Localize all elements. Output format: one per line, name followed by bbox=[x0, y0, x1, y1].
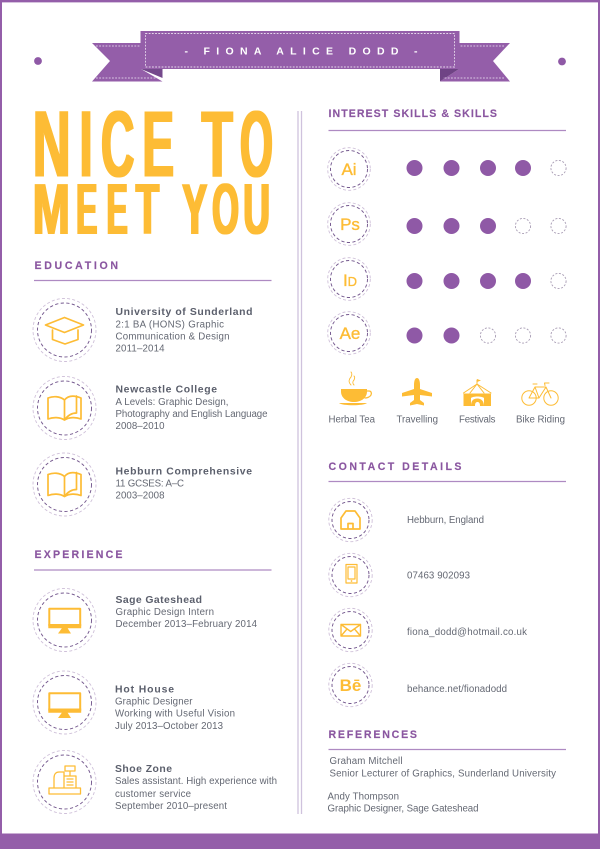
heading: contact details: CONTACT DETAILS bbox=[328, 461, 462, 473]
panel: education bbox=[33, 260, 272, 516]
title: nice to meet you: M bbox=[33, 168, 70, 250]
panel: interests bbox=[328, 372, 565, 426]
entry: hot house: July 2013–October 2013 bbox=[115, 721, 223, 732]
icon: plane bbox=[402, 378, 432, 406]
title: nice to meet you: E bbox=[142, 91, 174, 197]
entry: hebburn comprehensive bbox=[33, 453, 252, 516]
reference: andy thompson bbox=[328, 792, 478, 814]
name ribbon banner bbox=[92, 31, 510, 82]
entry: newcastle college: Newcastle College bbox=[116, 384, 217, 396]
title: nice to meet you: E bbox=[107, 168, 128, 250]
label: herbal tea: Herbal Tea bbox=[328, 414, 376, 426]
entry: shoe zone: September 2010–present bbox=[115, 801, 227, 812]
entry: university of sunderland: 2:1 BA (HONS) Graphic bbox=[116, 320, 224, 330]
entry: newcastle college bbox=[33, 376, 268, 440]
reference: graham mitchell: Graham Mitchell bbox=[330, 756, 402, 767]
panel: experience bbox=[33, 549, 277, 814]
contact: phone: 07463 902093 bbox=[407, 570, 470, 582]
title: nice to meet you: T bbox=[202, 92, 233, 198]
contact: behance bbox=[329, 663, 507, 707]
entry: hebburn comprehensive: 2003–2008 bbox=[116, 490, 164, 502]
title: nice to meet you: O bbox=[212, 170, 239, 251]
entry: university of sunderland: 2011–2014 bbox=[116, 344, 165, 354]
entry: shoe zone: Shoe Zone bbox=[115, 764, 172, 775]
name text: - FIONA ALICE DODD - bbox=[184, 46, 418, 58]
entry: newcastle college: 2008–2010 bbox=[116, 421, 165, 432]
entry: sage gateshead: Sage Gateshead bbox=[116, 595, 202, 606]
entry: university of sunderland: University of Sunderland bbox=[116, 307, 252, 318]
entry: sage gateshead bbox=[33, 588, 258, 652]
skill: illustrator: Ai bbox=[341, 160, 357, 179]
panel: references bbox=[328, 729, 566, 814]
panel: contact details bbox=[328, 461, 566, 707]
title: nice to meet you: I bbox=[80, 92, 92, 197]
reference: graham mitchell: Senior Lecturer of Graphics, Sunderland University bbox=[330, 768, 556, 780]
label: bike riding: Bike Riding bbox=[516, 414, 565, 426]
contact: email: fiona_dodd@hotmail.co.uk bbox=[407, 627, 527, 638]
icon: herbal tea bbox=[339, 372, 371, 405]
skill: photoshop bbox=[328, 203, 566, 245]
decorative dot right bbox=[558, 58, 566, 65]
contact: address bbox=[329, 498, 484, 542]
entry: shoe zone bbox=[33, 750, 277, 814]
panel: interest skills and skills bbox=[328, 108, 566, 354]
entry: newcastle college: A Levels: Graphic Design, bbox=[116, 397, 228, 408]
title: nice to meet you: O bbox=[240, 92, 273, 197]
entry: hot house: Working with Useful Vision bbox=[115, 708, 235, 720]
contact: behance: Bē bbox=[340, 676, 361, 695]
heading: references: REFERENCES bbox=[328, 729, 417, 741]
reference: graham mitchell bbox=[330, 756, 556, 780]
contact: phone bbox=[329, 553, 470, 597]
title: nice to meet you bbox=[33, 91, 273, 251]
label: travelling: Travelling bbox=[396, 414, 438, 426]
contact: address: Hebburn, England bbox=[407, 515, 484, 526]
skill: after effects: Ae bbox=[340, 324, 360, 343]
title: nice to meet you: Y bbox=[182, 170, 207, 250]
entry: hot house: Graphic Designer bbox=[115, 696, 193, 708]
contact: email bbox=[329, 608, 527, 652]
entry: hebburn comprehensive: Hebburn Comprehensive bbox=[116, 466, 252, 478]
entry: hebburn comprehensive: 11 GCSES: A–C bbox=[116, 478, 184, 490]
title: nice to meet you: T bbox=[136, 169, 159, 250]
skill: illustrator bbox=[328, 148, 566, 190]
title: nice to meet you: U bbox=[243, 170, 270, 250]
entry: sage gateshead: December 2013–February 2014 bbox=[116, 619, 258, 630]
heading: interest skills: INTEREST SKILLS & SKILLS bbox=[328, 108, 497, 120]
entry: shoe zone: customer service bbox=[115, 789, 191, 800]
decorative dot left bbox=[34, 57, 42, 65]
title: nice to meet you: N bbox=[33, 93, 71, 198]
title: nice to meet you: E bbox=[76, 168, 97, 250]
skill: photoshop: Ps bbox=[340, 215, 360, 234]
entry: hot house bbox=[33, 671, 235, 734]
skill: after effects bbox=[328, 312, 566, 354]
label: festivals: Festivals bbox=[459, 414, 496, 426]
icon: festival tent bbox=[464, 379, 491, 406]
skill: indesign bbox=[328, 258, 566, 300]
contact: behance: behance.net/fionadodd bbox=[407, 684, 507, 695]
entry: hot house: Hot House bbox=[115, 684, 174, 696]
footer band bbox=[0, 834, 600, 849]
title: nice to meet you: C bbox=[101, 92, 134, 197]
reference: andy thompson: Graphic Designer, Sage Gateshead bbox=[328, 804, 478, 814]
reference: andy thompson: Andy Thompson bbox=[328, 792, 399, 802]
entry: university of sunderland: Communication & Design bbox=[116, 332, 230, 342]
entry: shoe zone: Sales assistant. High experience with bbox=[115, 776, 277, 787]
entry: newcastle college: Photography and English Language bbox=[116, 409, 268, 420]
heading: education: EDUCATION bbox=[34, 260, 118, 272]
icon: bicycle bbox=[522, 383, 558, 405]
skill: indesign: ID bbox=[343, 271, 357, 290]
entry: university of sunderland bbox=[33, 298, 252, 362]
entry: sage gateshead: Graphic Design Intern bbox=[116, 607, 214, 618]
column divider bbox=[298, 111, 302, 814]
heading: experience: EXPERIENCE bbox=[34, 549, 122, 561]
